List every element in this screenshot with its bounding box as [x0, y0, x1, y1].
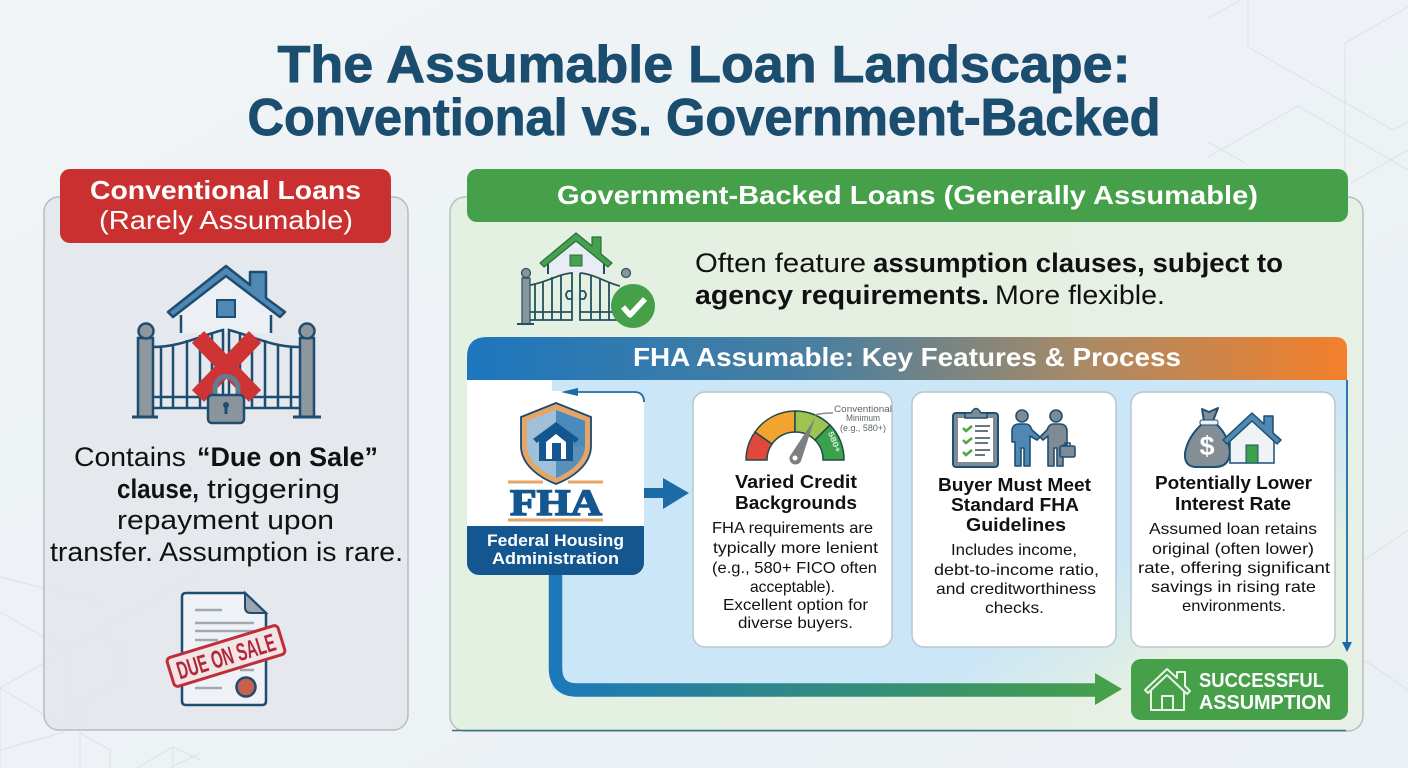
card: FHA logo: Federal Housing [487, 531, 624, 550]
text: due on sale explanation: “Due on Sale” [197, 442, 378, 472]
panel: government-backed loans [450, 169, 1363, 731]
icon: credit gauge: Minimum [846, 413, 880, 423]
icon: credit gauge: Conventional [834, 404, 892, 414]
arrow: down to successful assumption [1342, 380, 1352, 652]
card: FHA logo [467, 391, 644, 575]
heading: FHA key features and process: FHA Assumable: Key Features & Process [633, 342, 1181, 372]
icon: money bag and house: $ [1199, 431, 1215, 461]
text: assumption clauses summary: Often feature [695, 248, 866, 278]
icon: credit gauge: 580+ [826, 430, 843, 454]
card: buyer must meet FHA guidelines: Standard FHA [951, 495, 1079, 515]
card: buyer must meet FHA guidelines: checks. [985, 600, 1044, 617]
card: FHA logo: FHA [510, 483, 602, 524]
callout: successful assumption [1131, 659, 1348, 720]
icon: checklist clipboard [953, 408, 998, 467]
heading: conventional loans: Conventional Loans [90, 175, 361, 205]
arrow: FHA to features [644, 478, 689, 509]
card: buyer must meet FHA guidelines [912, 392, 1116, 647]
icon: money bag and house [1185, 408, 1281, 467]
text: due on sale explanation: Contains [74, 442, 186, 472]
card: buyer must meet FHA guidelines: Includes income, [951, 542, 1077, 559]
card: potentially lower interest rate: rate, offering significant [1138, 560, 1331, 577]
icon: locked gate with house and red cross [132, 266, 321, 423]
callout: successful assumption: ASSUMPTION [1199, 692, 1331, 714]
panel: FHA assumable [467, 337, 1352, 720]
card: buyer must meet FHA guidelines: Buyer Must Meet [938, 475, 1091, 495]
card: varied credit backgrounds: typically more lenient [713, 540, 879, 557]
card: potentially lower interest rate: savings in rising rate [1151, 579, 1316, 596]
card: varied credit backgrounds [693, 392, 892, 647]
title: Conventional vs. Government-Backed [248, 89, 1160, 147]
text: assumption clauses summary: agency requirements. [695, 280, 989, 310]
text: assumption clauses summary: More flexible. [995, 280, 1165, 310]
text: assumption clauses summary: assumption clauses, subject to [873, 248, 1283, 278]
panel: conventional loans [44, 169, 408, 730]
icon: open gate with check mark [517, 233, 655, 328]
card: buyer must meet FHA guidelines: debt-to-income ratio, [934, 562, 1099, 579]
card: varied credit backgrounds: Varied Credit [735, 472, 857, 492]
icon: handshake [1012, 410, 1075, 466]
card: potentially lower interest rate: environments. [1182, 598, 1286, 615]
text: due on sale explanation: transfer. Assumption is rare. [50, 537, 403, 567]
title [248, 36, 1160, 147]
card: varied credit backgrounds: Backgrounds [735, 493, 857, 513]
heading: FHA key features and process [467, 337, 1347, 380]
card: potentially lower interest rate: Assumed loan retains [1149, 521, 1317, 538]
callout: successful assumption: SUCCESSFUL [1199, 670, 1324, 692]
card: potentially lower interest rate: original (often lower) [1152, 541, 1314, 558]
icon: house outline [1145, 669, 1190, 710]
text: due on sale explanation: clause, [117, 474, 199, 504]
heading: conventional loans: (Rarely Assumable) [99, 205, 353, 235]
card: potentially lower interest rate: Interest Rate [1175, 494, 1291, 514]
icon: due on sale document: DUE ON SALE [173, 629, 279, 685]
icon: credit gauge: (e.g., 580+) [840, 423, 886, 433]
card: varied credit backgrounds: (e.g., 580+ FICO often [712, 560, 877, 577]
icon: credit gauge [746, 404, 892, 465]
heading: conventional loans [60, 169, 391, 243]
arrow: return to FHA card [561, 388, 644, 402]
card: buyer must meet FHA guidelines: Guidelines [966, 515, 1066, 535]
card: varied credit backgrounds: FHA requirements are [712, 520, 873, 537]
icon: FHA shield [521, 403, 591, 484]
card: varied credit backgrounds: diverse buyers. [738, 615, 853, 632]
card: varied credit backgrounds: Excellent option for [723, 597, 869, 614]
arrow: process flow to successful assumption [556, 570, 1122, 705]
icon: due on sale document [166, 593, 286, 705]
card: potentially lower interest rate: Potentially Lower [1155, 473, 1312, 493]
heading: government-backed loans [467, 169, 1348, 222]
card: potentially lower interest rate [1131, 392, 1335, 647]
text: due on sale explanation: triggering [207, 474, 340, 504]
text: assumption clauses summary [695, 248, 1283, 310]
text: due on sale explanation: repayment upon [117, 505, 334, 535]
card: FHA logo: Administration [492, 549, 619, 568]
card: buyer must meet FHA guidelines: and creditworthiness [936, 581, 1096, 598]
heading: government-backed loans: Government-Backed Loans (Generally Assumable) [557, 180, 1258, 210]
text: due on sale explanation [50, 442, 403, 567]
title: The Assumable Loan Landscape: [278, 36, 1130, 94]
card: varied credit backgrounds: acceptable). [750, 579, 835, 596]
